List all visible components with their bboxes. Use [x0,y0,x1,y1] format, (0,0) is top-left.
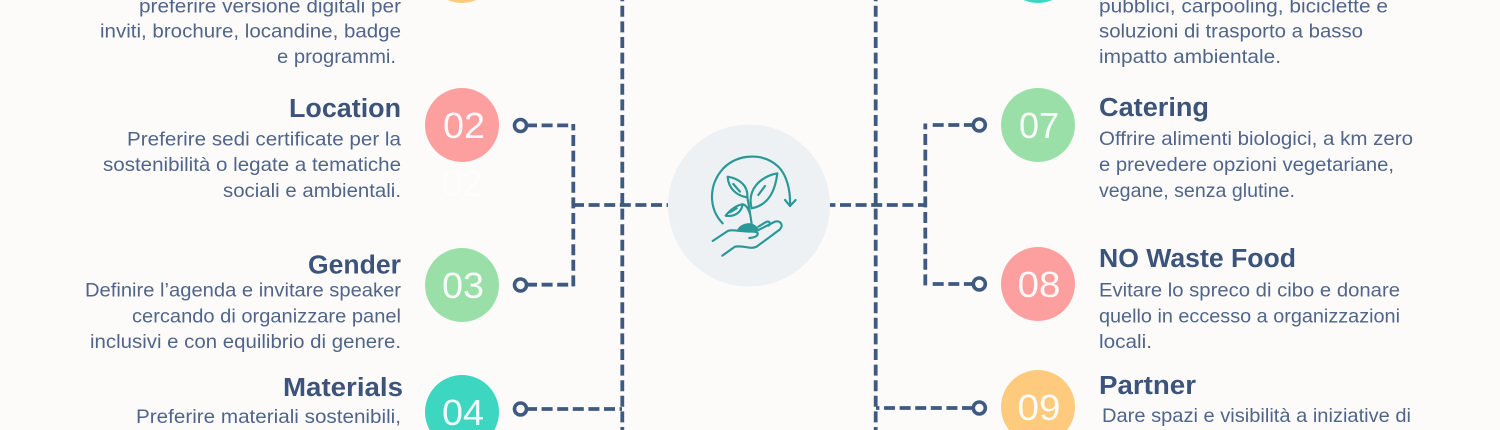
number circle 08: 08 [1018,264,1060,305]
text: gender description: cercando di organizzare panel [132,306,401,328]
text: gender description [85,280,402,353]
text: item 01 description: inviti, brochure, locandine, badge [100,20,401,42]
number circle 06 [1001,0,1075,3]
number circle 01 [425,0,499,3]
text: materials description: Preferire materiali sostenibili, [136,406,401,428]
text: gender description: inclusivi e con equilibrio di genere. [90,331,401,353]
text: location description: Preferire sedi certificate per la [127,128,401,150]
text: item 01 description: e programmi. [277,46,396,68]
number circle 04 [425,375,499,430]
number circle 02 [425,88,499,204]
heading: Partner [1099,372,1196,400]
panel: item 07 Catering [1001,88,1413,202]
text: item 06 description: impatto ambientale. [1099,46,1281,68]
panel: item 09 Partner [1001,370,1411,430]
heading: NO Waste Food [1099,245,1296,273]
icon: plant in hand with cycle arrow [712,157,796,256]
number circle 08 [1001,247,1075,321]
text: catering description [1099,128,1413,202]
number circle 09: 09 [1018,387,1060,428]
central circle [668,124,830,286]
left connector lines [514,0,668,430]
text: location description: sostenibilità o legate a tematiche [103,154,401,176]
number circle 02: 02 [442,163,482,204]
text: catering description: e prevedere opzioni vegetariane, [1099,154,1394,176]
number circle 03: 03 [442,265,484,306]
panel: item 02 Location [103,88,499,204]
text: item 01 description [100,0,402,68]
panel: item 04 Materials [136,374,499,430]
text: gender description: Definire l’agenda e invitare speaker [85,280,402,302]
panel: item 06 [1001,0,1388,68]
number circle 03 [425,248,499,322]
text: item 06 description: soluzioni di trasporto a basso [1099,20,1363,42]
heading: Materials [283,374,403,402]
right connector lines [829,0,985,430]
number circle 09 [1001,370,1075,430]
text: no waste description: Evitare lo spreco di cibo e donare [1099,280,1400,302]
heading: Catering [1099,94,1209,122]
text: partner description: Dare spazi e visibilità a iniziative di [1102,405,1411,427]
number circle 02: 02 [443,105,485,146]
text: location description [103,128,401,202]
heading: Location [289,95,401,123]
panel: item 03 Gender [85,248,499,353]
number circle 07: 07 [1019,105,1059,146]
number circle 07 [1001,88,1075,162]
text: catering description: vegane, senza glutine. [1099,180,1295,202]
text: no waste description [1099,280,1400,353]
panel: item 01 [100,0,499,68]
heading: Gender [308,252,401,280]
text: item 06 description [1099,0,1388,68]
text: location description: sociali e ambientali. [223,180,401,202]
text: no waste description: quello in eccesso a organizzazioni [1099,306,1400,328]
panel: item 08 NO Waste Food [1001,245,1400,353]
text: no waste description: locali. [1099,331,1152,353]
text: catering description: Offrire alimenti biologici, a km zero [1099,128,1413,150]
